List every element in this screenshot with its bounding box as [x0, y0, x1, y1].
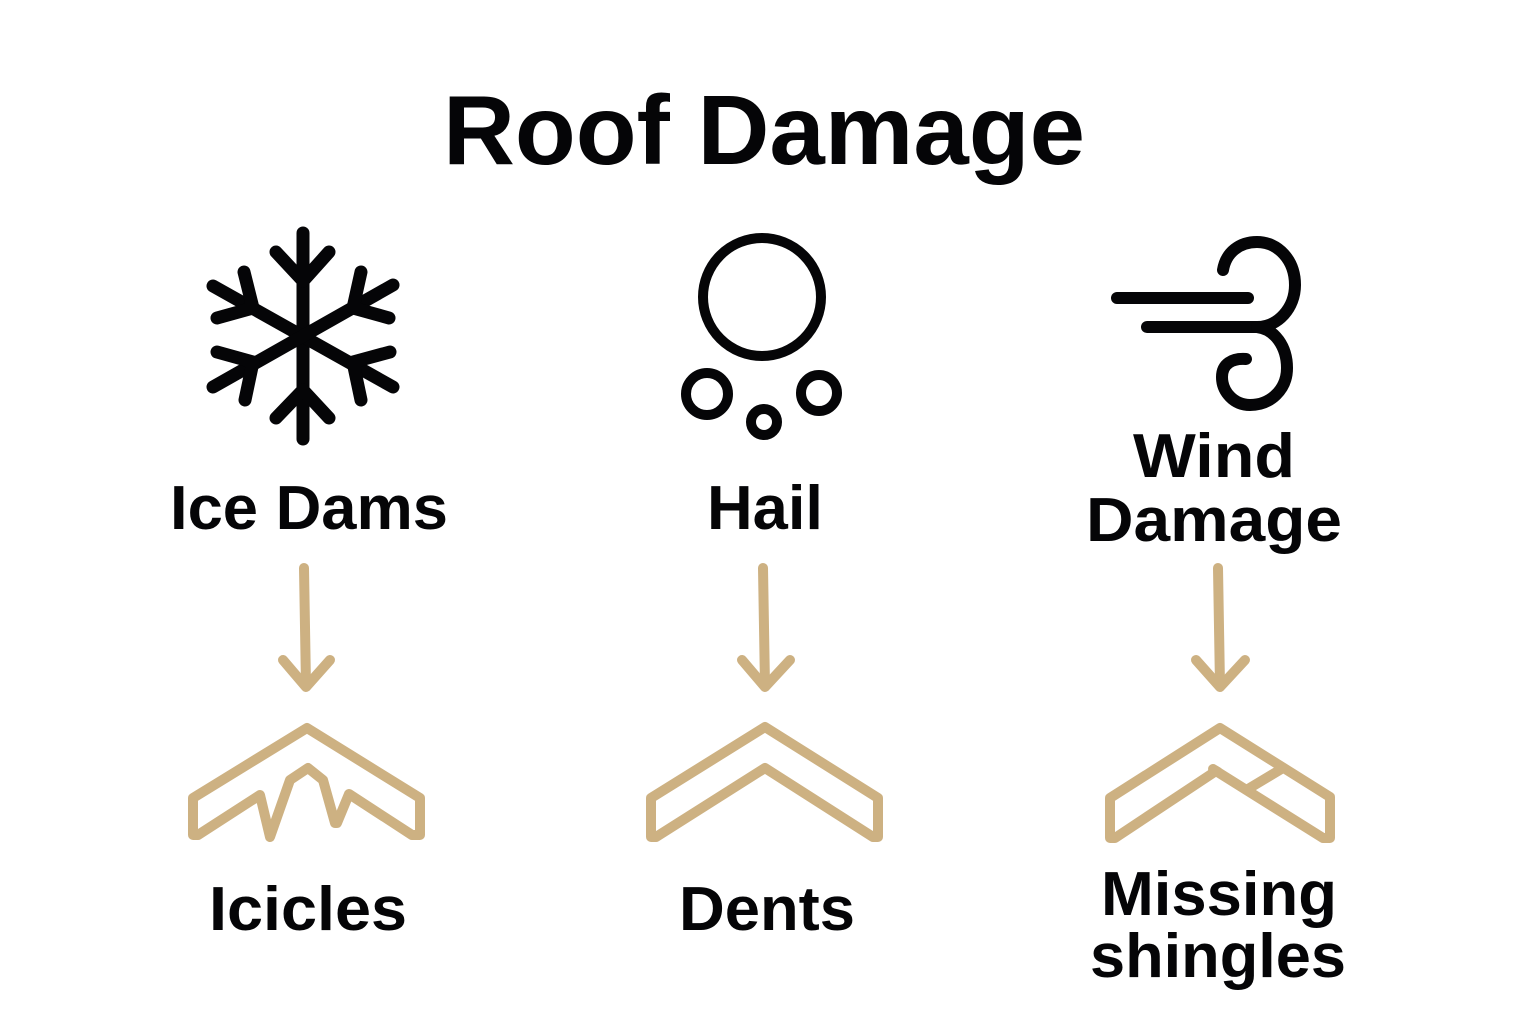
label: missing shingles: Missing [1101, 860, 1337, 929]
label: wind damage [1086, 422, 1342, 555]
arrow: ice dams to icicles [283, 568, 330, 687]
icon: roof with icicles [193, 728, 420, 837]
label: missing shingles [1090, 860, 1346, 991]
icon: snowflake [213, 233, 393, 439]
label: dents: Dents [679, 875, 855, 944]
label: icicles: Icicles [209, 875, 407, 944]
label: hail: Hail [707, 474, 823, 543]
label: ice dams: Ice Dams [170, 474, 448, 543]
label: wind damage: Damage [1086, 486, 1342, 555]
icon: hail [686, 238, 837, 435]
label: missing shingles: shingles [1090, 922, 1346, 991]
icon: roof with dents [651, 727, 878, 837]
arrow: wind damage to missing shingles [1196, 568, 1245, 687]
title: Roof Damage [443, 75, 1085, 185]
icon: wind [1117, 242, 1295, 405]
label: wind damage: Wind [1133, 422, 1295, 491]
arrow: hail to dents [742, 568, 790, 687]
icon: roof with missing shingles [1110, 728, 1330, 838]
